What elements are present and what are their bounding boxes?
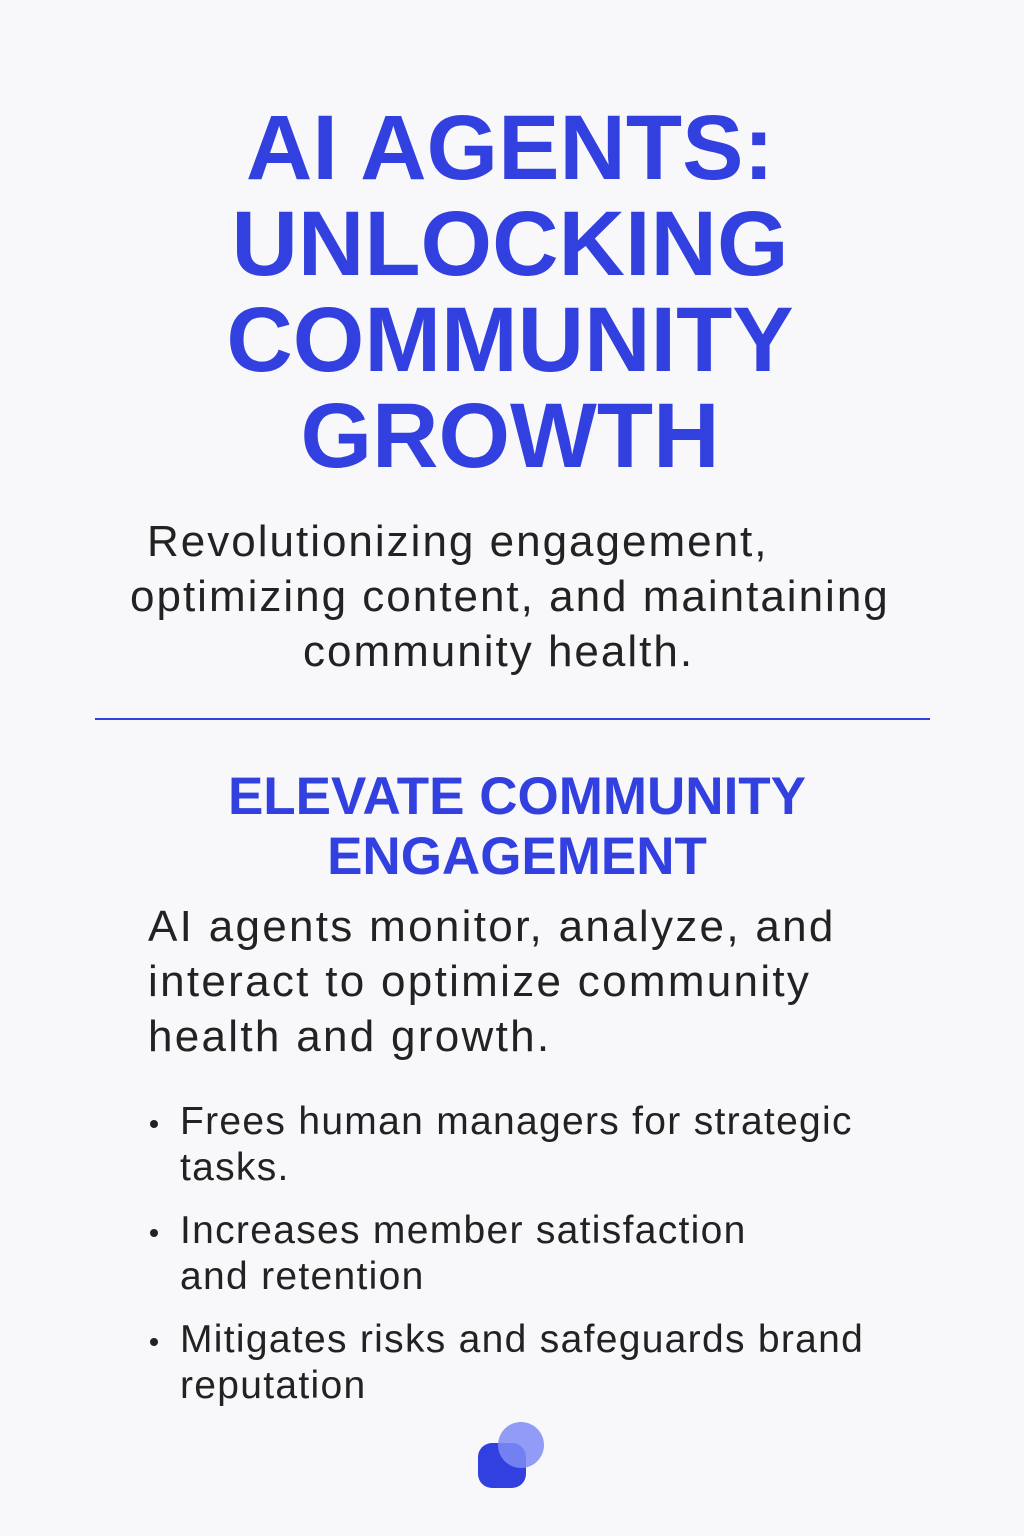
body text [148, 902, 836, 1061]
title [226, 97, 794, 487]
bullet list: Increases member satisfaction [180, 1209, 747, 1252]
subtitle: Revolutionizing engagement, [147, 517, 768, 566]
bullet list: Frees human managers for strategic [180, 1100, 853, 1143]
bullet list [150, 1100, 864, 1407]
section heading [228, 767, 806, 886]
title: COMMUNITY [226, 289, 794, 391]
title: AI AGENTS: [246, 97, 774, 199]
bullet list: and retention [180, 1255, 425, 1298]
body text: AI agents monitor, analyze, and [148, 902, 836, 951]
body text: interact to optimize community [148, 957, 811, 1006]
bullet list: reputation [180, 1364, 366, 1407]
section heading: ENGAGEMENT [327, 827, 707, 886]
bullet list: tasks. [180, 1146, 290, 1189]
title: GROWTH [300, 385, 720, 487]
title: UNLOCKING [231, 193, 789, 295]
body text: health and growth. [148, 1012, 551, 1061]
subtitle: optimizing content, and maintaining [130, 572, 890, 621]
icon: logo [478, 1422, 544, 1488]
subtitle: community health. [303, 627, 694, 676]
bullet list: Mitigates risks and safeguards brand [180, 1318, 864, 1361]
subtitle [130, 517, 890, 676]
section heading: ELEVATE COMMUNITY [228, 767, 806, 826]
